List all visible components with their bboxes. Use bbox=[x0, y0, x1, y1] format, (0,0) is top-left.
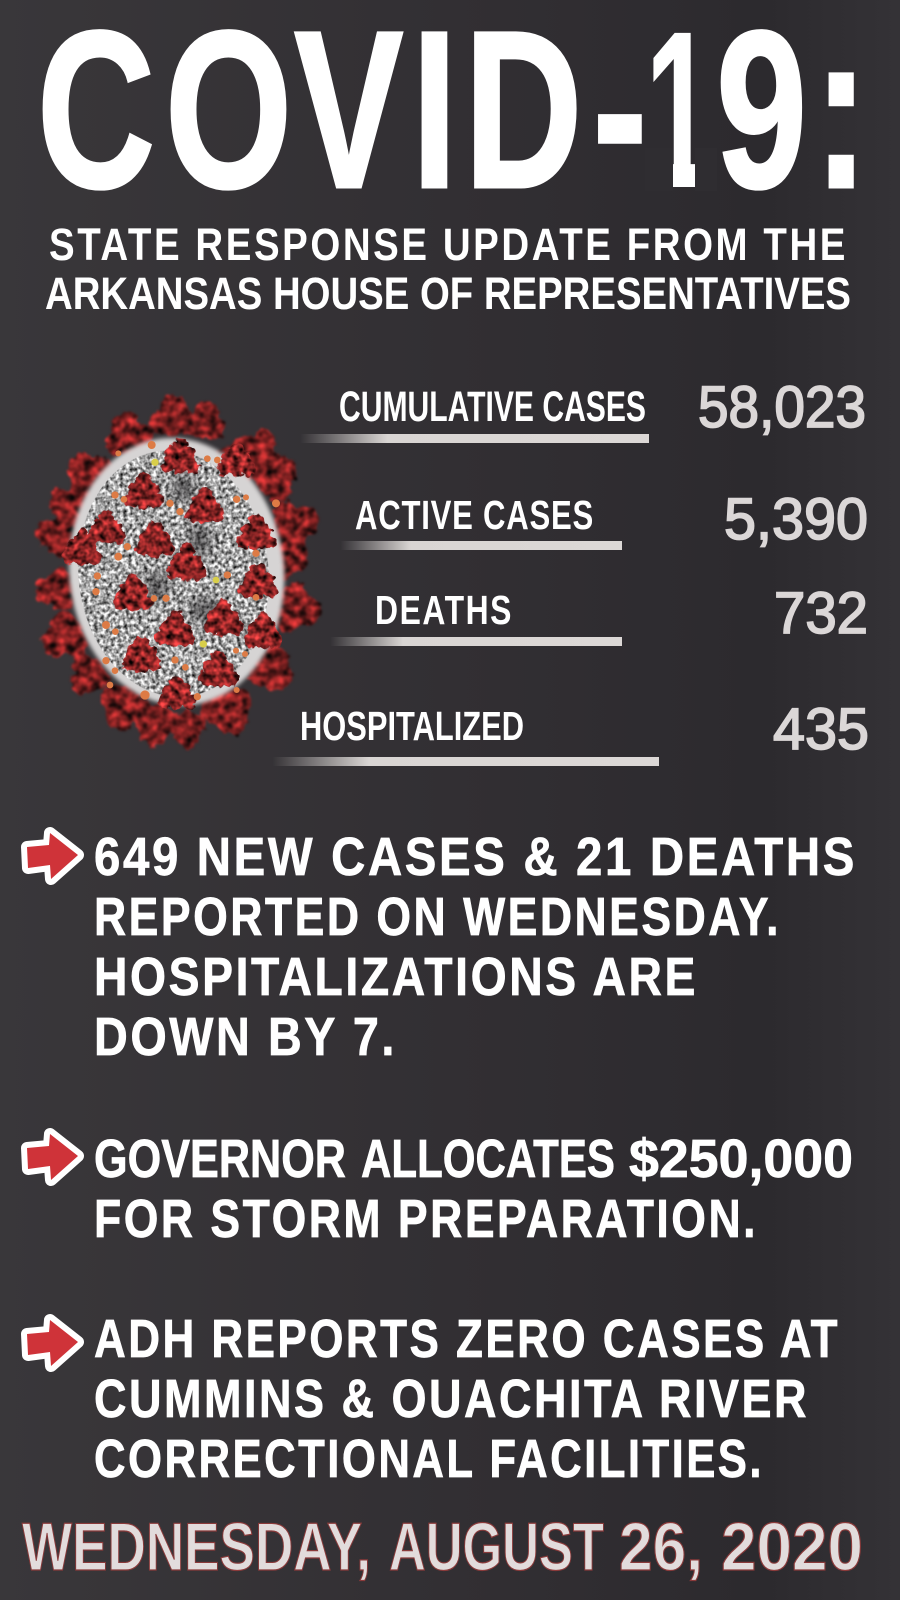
bullet: new cases: DOWN BY 7. bbox=[94, 1007, 397, 1067]
stat: cumulative cases: 58,023 bbox=[698, 375, 866, 440]
stat: deaths: DEATHS bbox=[375, 587, 513, 633]
bullet: governor: $250,000 bbox=[629, 1129, 853, 1189]
bullet: ADH: CORRECTIONAL FACILITIES. bbox=[94, 1429, 764, 1489]
stat: active cases: 5,390 bbox=[724, 487, 868, 552]
bullet: governor: GOVERNOR bbox=[94, 1129, 346, 1189]
stat: hospitalized: 435 bbox=[773, 697, 869, 762]
icon: arrow 2 bbox=[27, 1134, 78, 1180]
date bbox=[22, 1509, 863, 1585]
bullet: governor: FOR STORM PREPARATION. bbox=[94, 1189, 758, 1249]
bullet: new cases: HOSPITALIZATIONS ARE bbox=[94, 947, 698, 1007]
date: 26, bbox=[619, 1509, 703, 1585]
stat: hospitalized bbox=[272, 697, 869, 766]
subtitle bbox=[45, 219, 851, 319]
stat: active cases: ACTIVE CASES bbox=[355, 492, 594, 538]
icon: coronavirus bbox=[31, 394, 326, 750]
icon: arrow 1 bbox=[27, 833, 78, 879]
date: WEDNESDAY, bbox=[22, 1509, 371, 1585]
date: 2020 bbox=[721, 1509, 863, 1585]
front spikes bbox=[62, 438, 283, 710]
stat: deaths bbox=[330, 581, 868, 646]
stat: active cases bbox=[340, 487, 868, 552]
dark shadows on sphere bbox=[145, 475, 223, 623]
sphere bbox=[56, 427, 297, 716]
stat: deaths: 732 bbox=[774, 581, 868, 646]
outer spikes bbox=[31, 394, 326, 750]
orange dots bbox=[92, 441, 280, 700]
bullet: governor: ALLOCATES bbox=[361, 1129, 615, 1189]
date: AUGUST bbox=[389, 1509, 604, 1585]
bullet: new cases bbox=[94, 827, 857, 1067]
stat: cumulative cases: CUMULATIVE CASES bbox=[339, 383, 646, 431]
stat: cumulative cases bbox=[300, 375, 866, 443]
icon: arrow 3 bbox=[27, 1320, 78, 1366]
stat: hospitalized: HOSPITALIZED bbox=[300, 703, 524, 749]
bullet: ADH bbox=[94, 1309, 840, 1489]
yellow dots bbox=[151, 459, 219, 648]
bullet: governor bbox=[94, 1129, 853, 1249]
